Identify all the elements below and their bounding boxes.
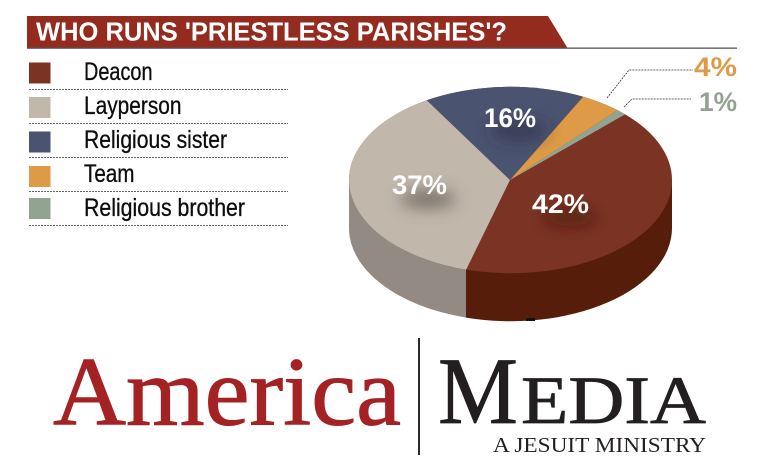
pie top surface — [349, 86, 672, 274]
label: 37%: 37% — [392, 170, 447, 200]
3D pie chart — [349, 86, 672, 322]
pie side: layperson — [349, 180, 466, 318]
pie slice: religious sister 16% — [426, 86, 584, 180]
legend item: Team — [29, 160, 288, 192]
legend item: Religious brother — [29, 194, 288, 226]
callout: 4% team — [607, 52, 737, 98]
pie slice: religious brother 1% — [511, 110, 625, 180]
legend item: Deacon: Deacon — [84, 58, 152, 86]
label: 16%: 16% — [484, 103, 536, 133]
legend item: Religious sister: Religious sister — [84, 126, 227, 154]
small dark mark at pie base — [526, 318, 535, 321]
wordmark: Media — [438, 338, 706, 444]
legend item: Religious brother: Religious brother — [84, 194, 245, 222]
legend item: Team: Team — [84, 160, 134, 188]
legend item: Deacon — [29, 58, 288, 90]
callout: 1% religious brother: 1% — [699, 87, 737, 117]
legend — [29, 58, 288, 226]
legend item: Religious sister — [29, 126, 288, 158]
wordmark: America: America — [53, 338, 401, 445]
wordmark: Media: EDIA — [521, 362, 706, 438]
title banner: WHO RUNS 'PRIESTLESS PARISHES'? — [36, 18, 507, 46]
pie slice: team 4% — [510, 96, 618, 180]
callout: 4% team: 4% — [694, 52, 737, 82]
callout: 1% religious brother — [624, 87, 737, 117]
pie side: deacon — [466, 180, 672, 321]
label: 42%: 42% — [532, 189, 589, 219]
pie slice: layperson 37% — [349, 100, 510, 270]
label shadows — [400, 122, 598, 226]
title banner — [27, 16, 737, 49]
tagline: A JESUIT MINISTRY — [493, 433, 706, 457]
logo divider — [418, 338, 420, 455]
legend item: Layperson — [29, 92, 288, 124]
logo: America Media — [53, 338, 706, 457]
wordmark: Media: M — [438, 338, 518, 444]
legend item: Layperson: Layperson — [84, 92, 182, 120]
pie slice: deacon 42% — [349, 86, 672, 274]
